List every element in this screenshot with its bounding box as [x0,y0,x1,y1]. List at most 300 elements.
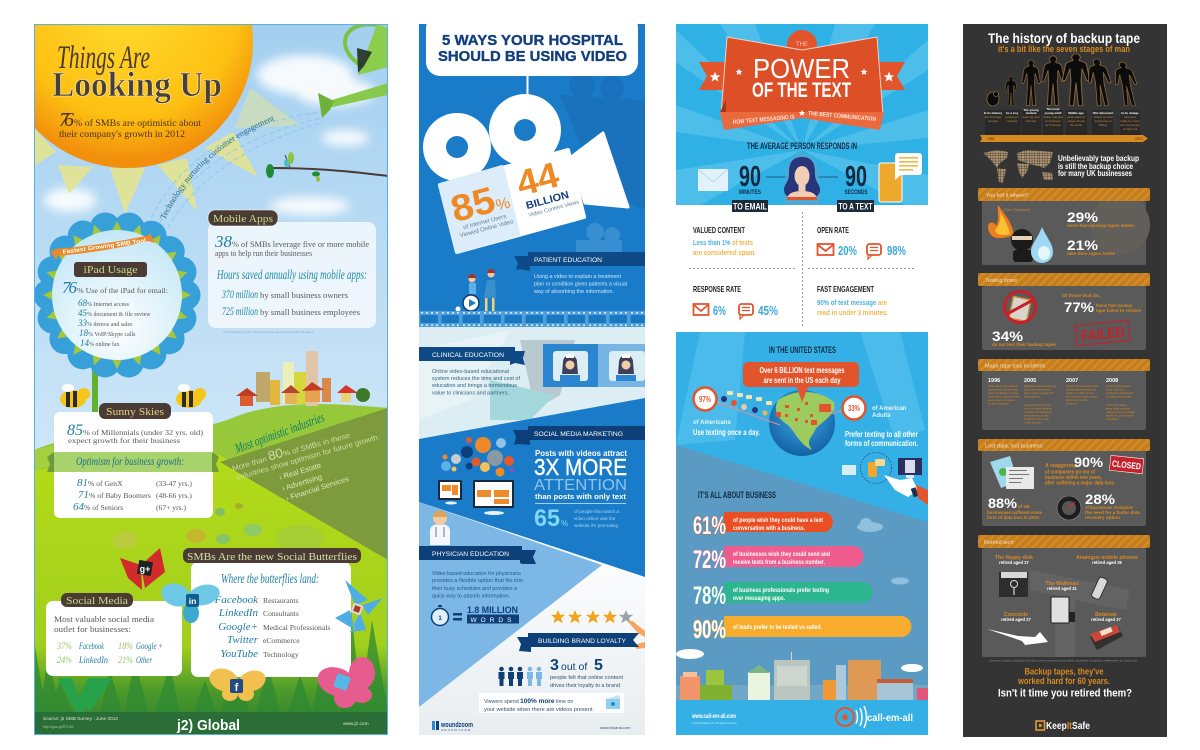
icon: envelope [698,169,728,191]
panel: mobile apps: *According to the Pew Internet and American Project [223,330,313,334]
skyline [676,652,928,700]
panel: flower iPad usage: 45% document & file review [78,308,151,318]
panel: sunny skies: (67+ yrs.) [156,503,186,512]
cell: fast engagement: read in under 3 minutes. [817,310,888,317]
label: iPad Usage [74,262,147,277]
panel: social media [46,593,182,676]
stat bar: 78%: 78% [693,582,726,610]
stage labels: learning new [1022,115,1040,119]
stat: 3X more attention: 3X MORE [534,454,627,480]
item: betamax [1090,612,1123,650]
cell: valued content: are considered spam. [693,248,756,257]
heading: average person responds: THE AVERAGE PERSON RESPONDS IN [747,141,857,151]
icon: flame thief and drop [988,205,1053,263]
panel: mobile apps: apps to help run their businesses [215,249,312,258]
ribbon: social media marketing [513,426,645,445]
stat 85%: % [494,195,512,215]
silhouettes: seven stages [987,54,1141,106]
header [426,24,638,94]
stat: 90 minutes to email [732,161,768,212]
header: 5 WAYS YOUR HOSPITAL [442,33,623,49]
panel: sunny skies: 85 [67,422,83,439]
stage shaded columns [985,110,1140,135]
section: lost data lost business: of businesses recognise [1085,505,1133,510]
panel: flower iPad usage: 14% online fax [80,338,120,348]
stage labels: Middle age [1068,111,1084,115]
panel: where the butterflies land: Medical Professionals [263,623,330,632]
section: major tape loss incidents: 1996 [988,378,1000,384]
section: major tape loss incidents: 2007 [1066,378,1078,384]
skyline and houses [236,351,370,406]
text: clinical education: Online video-based educational [432,369,509,375]
watering can [318,24,388,118]
white stats section [676,205,928,332]
section: lost data lost business: recovery option [1085,515,1120,520]
panel: where the butterflies land: Technology [263,650,299,659]
panel: mobile apps [208,210,376,334]
footer: j2 Global: http://goo.gl/RTLfM [43,725,74,729]
butterfly: facebook [209,668,266,701]
social icons cluster [441,437,514,476]
panel: social media: LinkedIn [78,656,108,666]
text: unbelievably tape backup: is still the backup choice [1058,162,1134,171]
panel: flower iPad usage: % Use of the iPad for email: [77,286,168,295]
section: major tape loss incidents: Backup tapes containing [1024,384,1056,388]
section: major tape loss incidents: customers, none of them [988,394,1020,398]
faint butterflies [113,503,324,551]
closing message: Isn't it time you retired them? [998,688,1132,700]
label: SMBs social butterflies: SMBs Are the new Social Butterflies [187,552,357,563]
text: patient education: plan or condition gives patients a visual [534,282,627,288]
butterfly: google plus [120,548,165,590]
stat bar: 61%: conversation with a business. [733,525,805,532]
text: unbelievably tape backup: Unbelievably tape backup [1058,154,1139,163]
ribbon: fastest growing SMB tool: Fastest Growing SMB Tool [62,238,147,256]
footer: j2 Global: Source: j2 SMB Survey : June 2012 [43,716,119,721]
panel: social media: Other [136,656,152,666]
clouds [44,55,375,215]
stat: 3X more attention: of people that watch a [574,509,619,514]
bar: Major tape loss incidents [985,364,1046,370]
section: you left it where: 21% [1067,237,1099,253]
section: major tape loss incidents [978,359,1150,430]
stat: 90 seconds to a text: 90 [845,161,867,193]
section: major tape loss incidents: of staff went missing on [1066,388,1097,392]
butterfly: google plus: g+ [140,564,150,574]
section: you left it where: more than backup tapes stolen [1067,223,1134,228]
callout: viewers spend 100% more [479,693,624,713]
section: testing times: found their backup [1096,303,1132,309]
section: major tape loss incidents: account details of many [988,391,1019,395]
section: major tape loss incidents: by the company [988,402,1009,406]
stat: 90 seconds to a text [837,161,874,212]
ground hills [34,404,388,735]
section: retired tech [978,535,1150,657]
logo: woundzoom: woundzoom [440,722,473,729]
item: analogue mobile phones: Analogue mobile phones [1076,555,1138,561]
stat: 1 minute equals 1.8 million words: WORDS [471,617,515,624]
item: concorde: Concorde [1004,612,1028,618]
stat: 3X more attention: website it's promoting [574,523,618,528]
stat bar: 78% [693,582,872,610]
footer: call-em-all: © 2016 Call-Em-All. All rights reserved. [692,721,737,725]
panel: social media: Google + [136,642,163,652]
section: testing times: tape failed to restore [1096,308,1141,314]
stat: 1 minute equals 1.8 million words [432,605,519,626]
stage labels: storage [988,119,998,123]
section: major tape loss incidents: records of employees [1024,410,1052,414]
panel: flower iPad usage [41,219,193,371]
stage labels: for backups [1045,119,1061,123]
stat: 3X more attention: 65 [534,505,560,532]
panel: where the butterflies land: Google+ [218,621,258,633]
section: testing times: 77% [1064,299,1095,315]
butterfly: youtube [335,580,383,632]
text: clinical education: system reduces the time and cost of [432,376,521,382]
icon: no clipboard [1004,292,1036,322]
banner: power of the text [699,30,905,130]
background rays [676,24,928,205]
section: major tape loss incidents: Data tapes lost while in [988,384,1018,388]
stat: 33% adults: Adults [872,413,891,419]
section: major tape loss incidents: transit from a bank with [988,388,1018,392]
stat bar: 78%: of business professionals prefer texting [733,587,829,594]
stat 85% [446,175,516,240]
bar [978,188,1150,201]
item: betamax: Betamax [1095,612,1117,618]
panel: social media: 24% [57,656,72,666]
bar [978,359,1150,371]
stage labels: failing [1099,123,1107,127]
panel: social media: Facebook [78,642,105,652]
cell: response rate: RESPONSE RATE [693,284,741,294]
panel: history of backup tape [963,24,1167,737]
bee left [60,384,90,408]
clouds on slate [857,518,909,584]
timeline arrow: 1951 [987,137,995,141]
banner: power of the text: POWER [753,53,850,84]
stat: 90 seconds to a text: SECONDS [844,190,868,196]
section: major tape loss incidents: Four more tapes [1106,403,1128,407]
cell: fast engagement [817,284,888,317]
item: analogue mobile phones: retired aged 26 [1092,560,1123,565]
text: unbelievably tape backup [1058,154,1139,178]
section: major tape loss incidents: a set of tapes holding [1024,406,1052,410]
cell: valued content: Less than 1% of texts [693,238,753,247]
sun rays [34,88,300,214]
stat: 3X more attention [534,449,627,532]
section: major tape loss incidents: elsewhere [1106,417,1120,421]
closing message [998,666,1132,700]
panel: mobile apps: 725 million [222,304,258,318]
band: optimism for business growth [47,452,219,472]
section: you left it where: take their tapes home [1067,251,1116,256]
section: lost data lost business [978,439,1150,526]
icon: globe [769,390,835,456]
stage labels: still used [1124,115,1136,119]
stat: 97% americans: Use texting once a day. [693,428,760,437]
connector lines [766,176,838,178]
item: walkman: retired aged 31 [1047,586,1078,591]
panel: sunny skies: 71% of Baby Boomers [78,489,151,501]
stat 85%: 85 [446,179,499,230]
item: analogue mobile phones [1076,555,1138,600]
section: lost data lost business: of companies go out of [1045,470,1095,476]
section: lost data lost business: A staggering [1045,463,1077,469]
panel: flower iPad usage: 33% demos and sales [77,318,133,328]
panel: mobile apps: by small business employees [260,308,360,317]
text: physician education: Video based education for physicians [432,571,521,577]
section: lost data lost business: 90% [1074,454,1104,470]
video camera [423,94,628,252]
stage labels: usage across [1067,119,1085,123]
section: major tape loss incidents: hospital in the north [1024,417,1050,421]
panel: flower iPad usage: 18% VoIP/Skype calls [79,328,136,338]
band: optimism for business growth: Optimism for business growth: [76,454,184,468]
butterfly: linkedin: in [189,596,196,606]
panel: where the butterflies land: Twitter [227,634,259,646]
section: major tape loss incidents: a public sector body [1106,394,1132,398]
section: major tape loss incidents: missing from a storage [1106,410,1136,414]
stat: 3 out of 5: 3 [550,657,559,674]
stage labels: widely adopted [1043,115,1063,119]
footer: call-em-all: call-em-all [867,713,913,724]
text: physician education: quick way to absorb information. [432,594,510,600]
icon: woman [784,153,820,205]
cell: valued content: VALUED CONTENT [693,225,746,235]
item: floppy disk [995,555,1033,597]
stat: 90 minutes to email: TO EMAIL [733,202,767,212]
text: patient education: way of absorbing the information. [533,289,614,295]
stage labels: Old retirement [1093,111,1113,115]
section: major tape loss incidents: financial firm [1024,394,1041,398]
text: clinical education [432,369,521,396]
panel: where the butterflies land: Restaurants [263,596,298,605]
section: major tape loss incidents: involved [1066,402,1077,406]
item: concorde: retired aged 27 [1001,617,1032,622]
closing message: Backup tapes, they've [1024,666,1104,676]
timeline arrow [980,135,1148,142]
olive industries panel: › Financial Services [285,474,350,503]
item: concorde [987,612,1048,645]
stat bar: 90% [693,616,912,644]
olive industries panel: › Advertising [281,472,323,493]
text: clinical education: education and brings a tremendous [432,383,517,389]
item: floppy disk: retired aged 27 [999,560,1030,565]
logo: woundzoom [432,721,473,732]
banner: power of the text: THE [796,42,808,48]
panel: social media: Most valuable social media [54,615,154,624]
section: major tape loss incidents: were lost by a large US [1024,391,1054,395]
text: clinical education: value to clinicians and partners. [432,390,509,396]
slate area [676,445,928,700]
stage labels: and prone to [1095,119,1112,123]
panel: social media: 21% [118,656,133,666]
ribbon: clinical education: CLINICAL EDUCATION [432,352,504,359]
stat: 90 seconds to a text: TO A TEXT [838,202,873,212]
heading: in the united states: IN THE UNITED STATES [769,345,836,355]
panel: things are looking up (j2 Global) [34,24,388,735]
stat bar: 72%: of businesses wish they could send and [733,551,830,558]
butterfly: facebook: f [235,682,239,694]
stat: 33% adults: Prefer texting to all other [845,430,918,439]
cell: response rate: 6% [713,303,726,318]
sign: closed [1109,455,1144,474]
olive industries panel: › Real Estate [278,461,322,482]
section: major tape loss incidents: route to a data centre [1066,391,1094,395]
ribbon: building brand loyalty [517,633,639,652]
item: floppy disk: The floppy disk [995,555,1033,561]
panel: where the butterflies land: YouTube [220,648,258,660]
section: major tape loss incidents: contractor working for [1106,391,1134,395]
panel: power of the text [676,24,928,735]
bee right [176,384,206,408]
footer: j2 Global: j2) Global [176,718,240,734]
stage labels: In its dotage [1121,111,1139,115]
section: testing times: Of those that do, [1062,293,1101,299]
timeline arrow: 2012 [1135,137,1143,141]
panel: mobile apps: 38 [214,232,232,251]
stage labels: capacity [1006,119,1018,123]
icon: recycle bin and menu [990,456,1034,489]
bar: You left it where? [986,193,1028,199]
olive industries panel: industries show optimism for future growth. [235,432,381,482]
cell: response rate: 45% [758,303,778,318]
icon: doctor [430,511,450,545]
header: SHOULD BE USING VIDEO [438,49,627,65]
stage labels: The lover [1046,107,1060,111]
stat: 1 minute equals 1.8 million words: 1 [438,616,442,622]
item: walkman [1045,581,1079,623]
branch with leaves [266,152,388,182]
ribbon: social media marketing: SOCIAL MEDIA MARKETING [534,431,623,438]
stat bar: 78%: over messaging apps. [733,595,785,602]
panel: where the butterflies land: Where the butterflies land: [221,571,319,586]
flower stem [92,370,98,412]
physician section background [419,502,602,707]
cell: fast engagement: FAST ENGAGEMENT [817,284,875,294]
url: wound zoom: www.thoana.com [600,725,631,730]
bar [978,439,1150,451]
section: you left it where [978,188,1150,265]
icon: five people [498,667,542,686]
label: Social Media: Social Media [66,596,128,607]
logo: woundzoom: ADVANTAGE [441,728,472,732]
panel: flower iPad usage: 76 [62,278,78,297]
panel: sunny skies: 81% of GenX [77,477,123,489]
olive industries panel: Most optimistic industries [232,410,326,456]
headline stat 76%: % of SMBs are optimistic about [74,118,201,129]
film stills with nurses [543,344,645,387]
section: major tape loss incidents: 2008 [1106,378,1118,384]
stage labels: slower to read [1094,115,1113,119]
stat: 3X more attention: ATTENTION [534,477,627,494]
text: unbelievably tape backup: for many UK businesses [1058,169,1133,178]
icon: speedometer [1057,496,1081,520]
stat 85%: of Internet Users [463,214,507,231]
panel: sunny skies: expect growth for their business [68,436,180,445]
devices and pointing hand [842,452,928,505]
stage labels: young adult [1044,111,1062,115]
headline stat 76%: their company's growth in 2012 [59,130,185,140]
social media section background [419,398,645,577]
blue section in the united states [676,332,928,735]
footer: call-em-all: www.call-em-all.com [691,714,736,720]
bar: Lost data, lost business [985,444,1043,450]
closing message: worked hard for 60 years. [1017,675,1110,686]
text: physician education: their busy schedules and provides a [432,586,517,592]
stage labels: As a boy [1006,111,1019,115]
label: SMBs social butterflies [183,548,361,563]
stat: 3 out of 5: drives their loyalty to a brand [550,683,620,689]
banner: power of the text: OF THE TEXT [752,79,851,102]
stage labels: at high risk [1123,127,1138,131]
ribbon: building brand loyalty: BUILDING BRAND LOYALTY [538,638,627,645]
stage labels: formats [1026,119,1036,123]
title: Things Are Looking Up: Looking Up [52,65,222,104]
stat bar: 61%: 61% [693,512,726,540]
stage labels: student [1026,111,1036,115]
stat: 3X more attention: than posts with only text [535,492,627,501]
stat 44 billion [512,150,580,220]
label: Sunny Skies [99,403,171,419]
stage labels [984,107,1140,131]
text: physician education: provides a flexible option that fits into [432,578,523,584]
stage labels: by business [1045,123,1061,127]
section: major tape loss incidents: Tapes with personal data [1066,384,1098,388]
ribbon: physician education: PHYSICIAN EDUCATION [432,551,509,558]
item: walkman: The Walkman [1045,581,1079,587]
heading: it's all about business: IT'S ALL ABOUT BUSINESS [698,490,776,501]
stat: 3 out of 5: 5 [594,657,603,674]
stage labels: The young [1023,108,1039,112]
footer: j2 Global: www.j2.com [343,721,369,727]
butterfly: linkedin [161,584,220,623]
section: lost data lost business: after suffering a major data loss. [1045,480,1116,486]
section: lost data lost business: the need for a faster data [1085,510,1140,515]
panel: where the butterflies land: eCommerce [263,636,300,645]
bottom leaves [58,678,112,712]
section: testing times [978,273,1150,350]
text: patient education [533,274,627,295]
stat bar: 61% [693,512,833,540]
icon: phone and message [879,153,922,202]
section: major tape loss incidents: 2005 [1024,378,1036,384]
section: lost data lost business: of UK [1018,504,1031,509]
stat: 97% americans: of Americans [693,420,731,426]
stat: 3 out of 5 [550,657,624,689]
footer: j2 Global [34,712,388,735]
footer: call-em-all [676,700,928,735]
film strip [419,311,645,327]
stat bar: 90%: 90% [693,616,726,644]
stage labels: In its infancy [984,111,1002,115]
olive industries panel: More than 80% of SMBs in these [230,426,351,474]
stat bar: 61%: of people wish they could have a text [733,517,824,524]
section: major tape loss incidents: Unencrypted tapes [1106,384,1131,388]
background: clinical area [419,327,645,439]
section: testing times: do not test their backup tapes [992,342,1056,347]
ribbon: patient education: PATIENT EDUCATION [534,257,602,264]
water arc text [150,112,324,232]
section: major tape loss incidents: facility in London and [1106,414,1134,418]
icon: hand [628,621,645,649]
bar: Retired tech [984,540,1014,546]
ribbon: patient education [514,252,645,271]
panel: sunny skies: 64% of Seniors [73,501,123,513]
panel: where the butterflies land [183,548,361,677]
panel: where the butterflies land: Consultants [263,609,299,618]
